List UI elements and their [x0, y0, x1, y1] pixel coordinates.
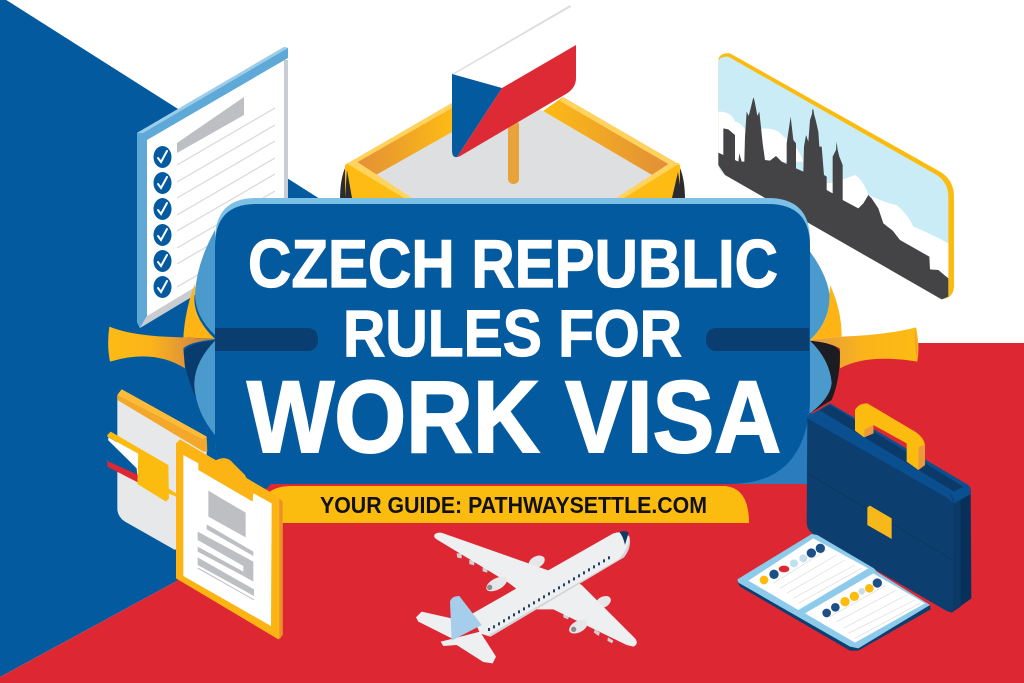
flag pole [508, 120, 519, 184]
fuselage [472, 532, 630, 637]
flag [452, 4, 576, 157]
guide banner: YOUR GUIDE: PATHWAYSETTLE.COM [320, 492, 707, 518]
icon: briefcase [807, 403, 971, 613]
skyline silhouette [718, 97, 948, 299]
left ornament with horn [108, 230, 215, 435]
icon: open passport book [737, 534, 931, 651]
icon: folder and clipboard [107, 389, 283, 639]
title line 1: CZECH REPUBLIC [248, 226, 778, 302]
page lines [773, 550, 920, 638]
page dots [760, 544, 882, 617]
handle [855, 403, 925, 470]
clipboard [176, 439, 283, 639]
icon: tray with Czech flag [340, 4, 685, 200]
tail planes [416, 612, 452, 638]
windows [488, 556, 610, 631]
tail fin [450, 596, 482, 641]
icon: airplane [416, 531, 637, 663]
right ornament with horn [810, 252, 918, 413]
icon: Prague skyline card [718, 53, 954, 299]
clasp [867, 506, 892, 539]
clouds [718, 112, 803, 163]
far wing and engines [434, 533, 557, 597]
folder tab with flag [107, 432, 168, 470]
title panel [215, 198, 810, 484]
icon: checklist document [137, 47, 288, 328]
title line 2: RULES FOR [343, 296, 682, 370]
guide banner [262, 486, 749, 523]
folder [117, 397, 207, 550]
title line 3: WORK VISA [247, 360, 781, 474]
panel dark bars [215, 328, 809, 351]
near wing and engines [537, 577, 637, 647]
